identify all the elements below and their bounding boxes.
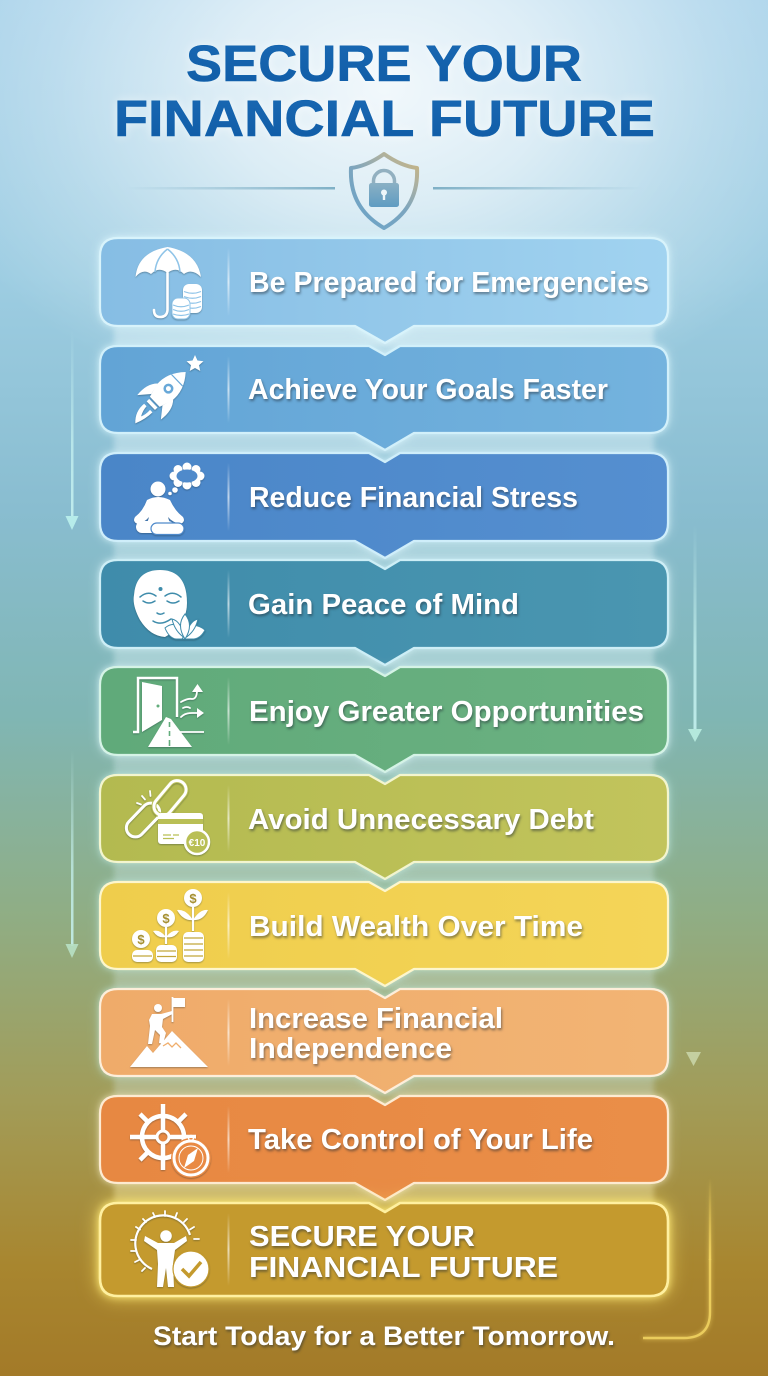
label: Reduce Financial Stress (249, 482, 578, 514)
label: Build Wealth Over Time (249, 911, 583, 943)
column divider (228, 356, 230, 423)
column divider (228, 1213, 230, 1286)
label: Take Control of Your Life (248, 1124, 593, 1156)
column divider (228, 248, 230, 316)
card shape (100, 882, 668, 986)
card shape (100, 667, 668, 772)
column divider (228, 1106, 230, 1173)
label: Achieve Your Goals Faster (248, 374, 608, 406)
card 10: Secure Your Financial Future (100, 1203, 668, 1296)
label: Increase Financial (249, 1003, 503, 1035)
card 5: Enjoy Greater Opportunities (100, 667, 668, 772)
card 4: Gain Peace of Mind (100, 560, 668, 665)
icon: shield with padlock (351, 154, 417, 228)
icon: calm face with lotus (134, 570, 205, 639)
card 8: Increase Financial Independence (100, 989, 668, 1093)
icon: meditating person with thought cloud (134, 462, 204, 534)
title: FINANCIAL FUTURE (114, 90, 655, 147)
label: Be Prepared for Emergencies (249, 267, 649, 299)
arrow: right upper (688, 525, 702, 742)
column divider (228, 677, 230, 745)
icon: broken chain and credit card (123, 777, 209, 854)
icon: growing coin stacks: $ (189, 891, 197, 906)
arrow: gold return line (643, 1177, 710, 1338)
label: Independence (249, 1033, 452, 1065)
icon: umbrella and coins (136, 247, 202, 319)
column divider (228, 785, 230, 852)
label (249, 1221, 558, 1284)
label: FINANCIAL FUTURE (249, 1252, 558, 1284)
icon: open door, road and arrows (133, 678, 204, 747)
arrow: left lower (66, 750, 78, 958)
arrow: right small triangle (686, 1052, 701, 1066)
icon: growing coin stacks: $ (162, 911, 170, 926)
label: Avoid Unnecessary Debt (248, 804, 594, 836)
icon: growing coin stacks (132, 889, 208, 962)
label: Enjoy Greater Opportunities (249, 696, 644, 728)
column divider (228, 570, 230, 638)
card 1: Be Prepared for Emergencies (100, 238, 668, 343)
card 7: Build Wealth Over Time (100, 882, 668, 986)
icon: ship wheel and compass (130, 1104, 211, 1178)
card shape (100, 346, 668, 450)
icon: broken chain and credit card: €10 (189, 838, 206, 849)
column divider (228, 463, 230, 531)
card shape (100, 1203, 668, 1296)
label: SECURE YOUR (249, 1221, 475, 1253)
card 2: Achieve Your Goals Faster (100, 346, 668, 450)
card shape (100, 1096, 668, 1200)
icon: growing coin stacks: $ (137, 932, 145, 947)
card shape (100, 238, 668, 343)
title (114, 35, 655, 147)
footer tagline: Start Today for a Better Tomorrow. (153, 1321, 615, 1351)
divider left (125, 187, 335, 190)
arrow: left upper (66, 330, 78, 530)
icon: climber with flag on mountain (130, 997, 208, 1067)
card 9: Take Control of Your Life (100, 1096, 668, 1200)
card shape (100, 453, 668, 558)
column divider (228, 999, 230, 1066)
icon: rocket and star (122, 355, 204, 434)
card shape (100, 989, 668, 1093)
card shape (100, 560, 668, 665)
label (249, 1003, 503, 1065)
column divider (228, 892, 230, 959)
card 6: Avoid Unnecessary Debt (100, 775, 668, 879)
card 3: Reduce Financial Stress (100, 453, 668, 558)
divider right (433, 187, 643, 190)
card shape (100, 775, 668, 879)
icon: person with sun arc and check badge (131, 1211, 209, 1287)
label: Gain Peace of Mind (248, 589, 519, 621)
title: SECURE YOUR (186, 35, 582, 92)
